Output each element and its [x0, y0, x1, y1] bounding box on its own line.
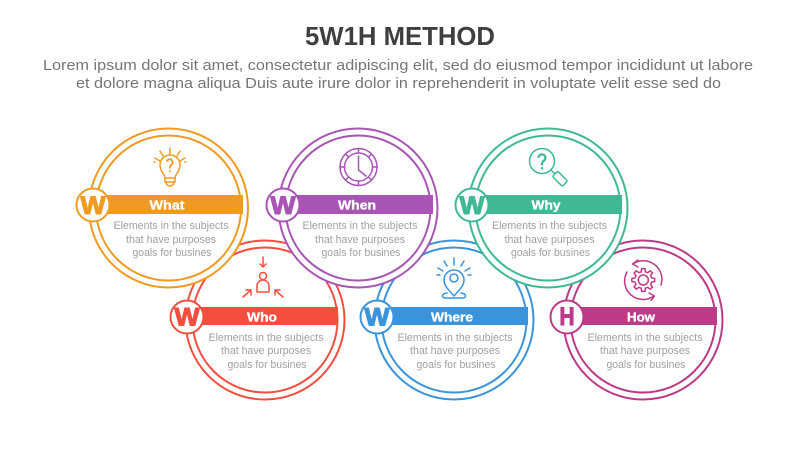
icon: clock [340, 148, 378, 186]
panel: when: When [338, 198, 376, 212]
icon: light bulb with question mark [154, 148, 186, 186]
panel: how: How [627, 310, 656, 324]
panel: where: that have purposes [410, 345, 500, 357]
panel: how: goals for busines [606, 359, 686, 371]
panel: how: Elements in the subjects [588, 332, 703, 344]
panel: why: that have purposes [504, 234, 595, 246]
panel: who: Elements in the subjects [208, 332, 324, 344]
icon: person with arrows [243, 257, 283, 297]
panel: why: W [460, 192, 485, 220]
panel: who: W [174, 304, 200, 332]
panel: why: goals for busines [511, 247, 590, 259]
panel: how: H [560, 303, 574, 331]
panel: why: Elements in the subjects [492, 220, 607, 232]
panel: how: that have purposes [600, 345, 690, 357]
panel: what: that have purposes [126, 234, 216, 246]
panel: why: Why [532, 198, 561, 212]
panel: who: Who [247, 310, 277, 324]
panel: when: goals for busines [322, 247, 401, 259]
panel: who [170, 240, 344, 400]
subtitle text [43, 57, 753, 92]
panel: what: W [80, 192, 106, 220]
title: 5W1H METHOD [305, 21, 495, 51]
panel: who: that have purposes [221, 345, 311, 357]
panel: when [266, 128, 438, 288]
panel: where: goals for busines [416, 359, 496, 371]
panel: what [76, 128, 248, 288]
subtitle text: et dolore magna aliqua Duis aute irure dolor in reprehenderit in voluptate velit esse sed do [76, 75, 721, 92]
panel: why [456, 128, 628, 288]
panel: when: that have purposes [315, 234, 405, 246]
panel: when: Elements in the subjects [302, 220, 418, 232]
icon: location pin [437, 258, 471, 298]
panel: who: goals for busines [228, 359, 307, 371]
panel: where: W [364, 304, 390, 332]
icon: magnifier with question mark [530, 148, 568, 186]
panel: where: Elements in the subjects [398, 332, 513, 344]
panel: what: goals for busines [132, 247, 212, 259]
panel: what: Elements in the subjects [114, 220, 229, 232]
panel: what: What [150, 198, 185, 212]
panel: where [360, 240, 534, 400]
icon: gear with cycle arrows [625, 260, 662, 300]
panel: when: W [270, 192, 296, 220]
subtitle text: Lorem ipsum dolor sit amet, consectetur adipiscing elit, sed do eiusmod tempor incididunt ut labore [43, 57, 753, 74]
panel: where: Where [431, 310, 473, 324]
panel: how [550, 240, 722, 400]
